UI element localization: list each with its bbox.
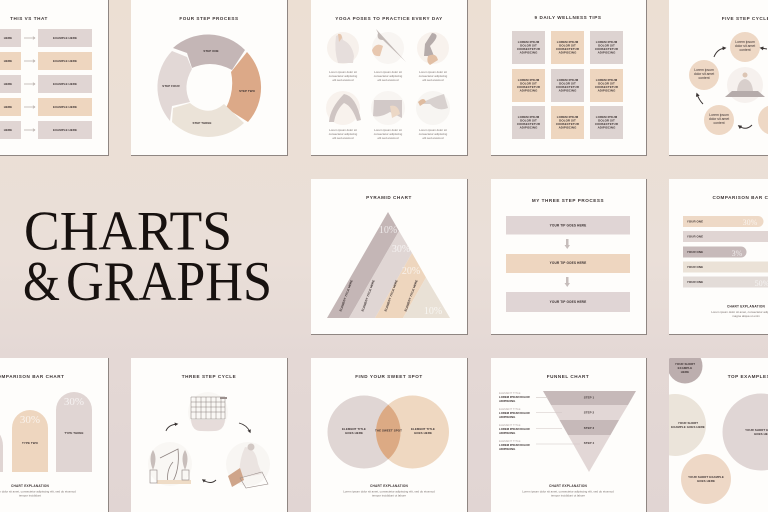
tip grid: CONSECTETUR: [517, 47, 541, 51]
tip grid: CONSECTETUR: [595, 47, 619, 51]
chart explanation: [711, 304, 768, 318]
cycle arrows: [697, 48, 767, 128]
heading: wellness tips: 9 DAILY WELLNESS TIPS: [535, 15, 601, 20]
pyramid: 10%: [379, 225, 397, 236]
funnel notes: ELEMENT TITLE: [499, 439, 521, 443]
tip grid: DOLOR SIT: [559, 44, 576, 48]
captions row two: Lorem ipsum dolor sit: [374, 128, 402, 132]
funnel notes: [499, 391, 530, 451]
chart explanation: Lorem ipsum dolor sit amet, consectetur adipiscing elit, sed do eiusmod: [343, 490, 435, 494]
rows: right column boxes: EXAMPLE HERE: [53, 105, 77, 109]
cycle circles: dolor sit amet: [694, 72, 714, 76]
horizontal bars: [683, 216, 768, 288]
captions row two: consectetur adipiscing: [329, 132, 358, 136]
icon: pose three: [417, 32, 449, 65]
funnel: STEP 3: [584, 426, 595, 430]
arch bars: 30%: [64, 396, 84, 408]
chart explanation: tempor incididunt ut labore: [551, 494, 585, 498]
title: charts and graphs: CHARTS: [24, 200, 232, 262]
rows: right column boxes: HERE: [4, 59, 12, 63]
chart explanation: [343, 484, 435, 498]
venn diagram: [328, 396, 449, 468]
funnel notes: ADIPISCING: [499, 399, 515, 403]
rows: right column boxes: EXAMPLE HERE: [53, 36, 77, 40]
panel: funnel chart: [491, 358, 647, 512]
example circles: GOES HERE: [697, 479, 715, 483]
cycle circles: dolor sit amet: [709, 117, 729, 121]
tip grid: LOREM IPSUM: [518, 78, 540, 82]
panel: three step process: [491, 179, 647, 335]
heading: three step process: MY THREE STEP PROCESS: [532, 198, 604, 203]
rows: right column boxes: [4, 29, 92, 139]
tip grid: CONSECTETUR: [556, 47, 580, 51]
chart explanation: CHART EXPLANATION: [727, 304, 766, 308]
panel: daily wellness tips: [491, 0, 647, 156]
tip grid: DOLOR SIT: [598, 44, 615, 48]
funnel notes: ELEMENT TITLE: [499, 423, 521, 427]
step bars: YOUR TIP GOES HERE: [550, 224, 586, 228]
tip grid: ADIPISCING: [598, 126, 616, 130]
captions row two: consectetur adipiscing: [374, 132, 403, 136]
cycle circles: dolor sit amet: [735, 44, 755, 48]
arch bars: TYPE THREE: [64, 431, 84, 435]
heading: pyramid chart: PYRAMID CHART: [366, 195, 412, 200]
funnel notes: ELEMENT TITLE: [499, 407, 521, 411]
captions row two: elit sed eiusmod: [423, 136, 444, 140]
venn diagram: GOES HERE: [345, 431, 363, 435]
chart explanation: CHART EXPLANATION: [370, 484, 409, 488]
tip grid: ADIPISCING: [520, 88, 538, 92]
cycle circles: Lorem ipsum: [694, 68, 714, 72]
icon: yoga headstand: [148, 442, 192, 486]
tip grid: DOLOR SIT: [559, 82, 576, 86]
example circles: YOUR SHORT EXAMPLE: [688, 475, 724, 479]
heading: funnel chart: FUNNEL CHART: [547, 374, 589, 379]
icon: pose four: [326, 91, 361, 125]
icon: pose five: [371, 91, 405, 125]
step bars: [506, 216, 630, 312]
cycle circles: [689, 32, 768, 135]
tip grid: ADIPISCING: [559, 50, 577, 54]
example circles: EXAMPLE GOES HERE: [671, 425, 705, 429]
tip grid: CONSECTETUR: [517, 85, 541, 89]
tip grid: CONSECTETUR: [595, 122, 619, 126]
example circles: HERE: [681, 370, 689, 374]
horizontal bars: YOUR ONE: [687, 280, 703, 284]
arch bars: 30%: [20, 414, 40, 426]
tip grid: DOLOR SIT: [598, 82, 615, 86]
arrows between columns: [24, 38, 35, 130]
heading: four step process: FOUR STEP PROCESS: [179, 16, 239, 21]
heading: three step cycle: THREE STEP CYCLE: [182, 374, 236, 379]
donut chart: STEP THREE: [192, 121, 212, 125]
venn diagram: THE SWEET SPOT: [375, 428, 402, 432]
pyramid: ELEMENT TITLE HERE: [338, 279, 354, 312]
title: charts and graphs: [23, 200, 272, 313]
tip grid: LOREM IPSUM: [596, 78, 618, 82]
panel: comparison bar chart arches: [0, 358, 109, 512]
step bars: YOUR TIP GOES HERE: [550, 300, 586, 304]
rows: right column boxes: EXAMPLE HERE: [53, 128, 77, 132]
heading: sweet spot: FIND YOUR SWEET SPOT: [355, 374, 423, 379]
captions row one: Lorem ipsum dolor sit: [374, 70, 402, 74]
pyramid: ELEMENT TITLE HERE: [403, 279, 419, 312]
heading: yoga poses: YOGA POSES TO PRACTICE EVERY DAY: [335, 16, 443, 21]
tip grid: DOLOR SIT: [559, 118, 576, 122]
captions row one: Lorem ipsum dolor sit: [419, 70, 447, 74]
tip grid: DOLOR SIT: [598, 118, 615, 122]
chart explanation: CHART EXPLANATION: [549, 484, 588, 488]
cycle circles: Lorem ipsum: [735, 40, 755, 44]
horizontal bars: YOUR ONE: [687, 220, 703, 224]
captions row two: Lorem ipsum dolor sit: [329, 128, 357, 132]
pyramid: 30%: [392, 244, 410, 255]
horizontal bars: YOUR ONE: [687, 250, 703, 254]
chart explanation: magna aliqua ut enim: [732, 314, 760, 318]
tip grid: [512, 31, 623, 139]
pyramid: ELEMENT TITLE HERE: [383, 279, 399, 312]
title: charts and graphs: &: [23, 251, 60, 313]
funnel notes: ADIPISCING: [499, 447, 515, 451]
funnel: STEP 2: [584, 410, 595, 414]
icon: pose two: [372, 29, 406, 64]
venn diagram: GOES HERE: [414, 431, 432, 435]
captions row one: elit sed eiusmod: [423, 78, 444, 82]
pyramid: 10%: [424, 306, 442, 317]
captions row one: [329, 70, 448, 82]
rows: right column boxes: EXAMPLE HERE: [53, 59, 77, 63]
cycle circles: Lorem ipsum: [709, 113, 729, 117]
example circles: EXAMPLE: [678, 366, 692, 370]
tip grid: CONSECTETUR: [556, 122, 580, 126]
horizontal bars: 3%: [732, 249, 743, 258]
cycle arrows: [166, 423, 250, 482]
horizontal bars: YOUR ONE: [687, 234, 703, 238]
rows: left column boxes: [0, 29, 21, 139]
panel: this vs that: [0, 0, 109, 156]
funnel: [543, 391, 636, 472]
tip grid: ADIPISCING: [559, 126, 577, 130]
cycle circles: content: [713, 121, 725, 125]
tip grid: ADIPISCING: [598, 88, 616, 92]
icon: pose one: [327, 32, 359, 64]
icon: pose six: [416, 91, 450, 125]
cycle circles: content: [698, 76, 710, 80]
tip grid: LOREM IPSUM: [557, 78, 579, 82]
donut chart: STEP TWO: [239, 89, 256, 93]
tip grid: CONSECTETUR: [595, 85, 619, 89]
cycle circles: content: [739, 48, 751, 52]
tip grid: ADIPISCING: [559, 88, 577, 92]
funnel notes: ADIPISCING: [499, 415, 515, 419]
leader lines: [536, 398, 580, 444]
tip grid: DOLOR SIT: [520, 82, 537, 86]
chart explanation: Lorem ipsum dolor sit amet, consectetur adipiscing elit, sed do eiusmod: [522, 490, 614, 494]
captions row one: elit sed eiusmod: [378, 78, 399, 82]
funnel notes: LOREM IPSUM DOLOR: [499, 427, 530, 431]
chart explanation: [522, 484, 614, 498]
step bars: YOUR TIP GOES HERE: [550, 261, 586, 265]
tip grid: DOLOR SIT: [520, 118, 537, 122]
chart explanation: tempor incididunt: [19, 494, 41, 498]
tip grid: LOREM IPSUM: [596, 40, 618, 44]
tip grid: LOREM IPSUM: [557, 115, 579, 119]
horizontal bars: YOUR ONE: [687, 265, 703, 269]
donut chart: STEP FOUR: [162, 84, 181, 88]
captions row two: elit sed eiusmod: [333, 136, 354, 140]
example circles: [669, 358, 768, 504]
tip grid: CONSECTETUR: [556, 85, 580, 89]
donut chart: [157, 34, 261, 137]
funnel: STEP 4: [584, 441, 595, 445]
tip grid: LOREM IPSUM: [557, 40, 579, 44]
chart explanation: CHART EXPLANATION: [11, 484, 50, 488]
panel: comparison bar chart horizontal: [669, 179, 768, 335]
heading: this vs that: THIS VS THAT: [10, 16, 48, 21]
pyramid: ELEMENT TITLE HERE: [360, 279, 376, 312]
funnel notes: LOREM IPSUM DOLOR: [499, 443, 530, 447]
panel: top examples: [669, 358, 768, 512]
down arrows: [564, 239, 570, 287]
example circles: YOUR SHORT: [678, 421, 698, 425]
panel: five step cycle: [669, 0, 768, 156]
panel: yoga poses: [311, 0, 468, 156]
panel: pyramid chart: [311, 179, 468, 335]
pyramid: 20%: [402, 266, 420, 277]
captions row two: elit sed eiusmod: [378, 136, 399, 140]
rows: right column boxes: HERE: [4, 128, 12, 132]
panel: four step process: [131, 0, 288, 156]
captions row one: consectetur adipiscing: [329, 74, 358, 78]
captions row two: Lorem ipsum dolor sit: [419, 128, 447, 132]
funnel notes: LOREM IPSUM DOLOR: [499, 411, 530, 415]
tip grid: ADIPISCING: [520, 50, 538, 54]
tip grid: LOREM IPSUM: [596, 115, 618, 119]
horizontal bars: 30%: [743, 218, 758, 227]
captions row one: consectetur adipiscing: [374, 74, 403, 78]
icon: bath: [188, 392, 228, 432]
pyramid: [327, 212, 450, 318]
tip grid: ADIPISCING: [520, 126, 538, 130]
captions row one: Lorem ipsum dolor sit: [329, 70, 357, 74]
rows: right column boxes: EXAMPLE HERE: [53, 82, 77, 86]
tip grid: LOREM IPSUM: [518, 40, 540, 44]
funnel: STEP 1: [584, 396, 595, 400]
captions row one: elit sed eiusmod: [333, 78, 354, 82]
example circles: YOUR SHORT: [675, 362, 695, 366]
icon: seated figure: [226, 442, 270, 488]
rows: right column boxes: HERE: [4, 105, 12, 109]
tip grid: CONSECTETUR: [517, 122, 541, 126]
panel: three step cycle: [131, 358, 288, 512]
venn diagram: ELEMENT TITLE: [411, 427, 435, 431]
chart explanation: tempor incididunt ut labore: [372, 494, 406, 498]
title: charts and graphs: GRAPHS: [66, 251, 272, 313]
funnel notes: LOREM IPSUM DOLOR: [499, 395, 530, 399]
tip grid: ADIPISCING: [598, 50, 616, 54]
donut chart: STEP ONE: [203, 49, 219, 53]
chart explanation: [0, 484, 76, 498]
panel: sweet spot venn: [311, 358, 468, 512]
funnel notes: ELEMENT TITLE: [499, 391, 521, 395]
captions row two: consectetur adipiscing: [419, 132, 448, 136]
tip grid: DOLOR SIT: [520, 44, 537, 48]
tip grid: LOREM IPSUM: [518, 115, 540, 119]
captions row two: [329, 128, 448, 140]
captions row one: consectetur adipiscing: [419, 74, 448, 78]
venn diagram: ELEMENT TITLE: [342, 427, 366, 431]
icon: meditating figure: [725, 67, 765, 103]
rows: right column boxes: HERE: [4, 36, 12, 40]
arch bars: TYPE TWO: [22, 441, 39, 445]
rows: right column boxes: HERE: [4, 82, 12, 86]
arch bars: [0, 392, 92, 472]
funnel notes: ADIPISCING: [499, 431, 515, 435]
